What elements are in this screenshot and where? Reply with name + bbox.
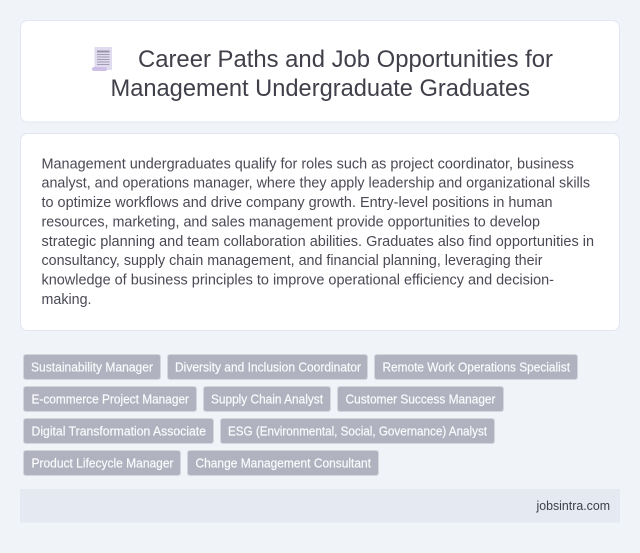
panel: job tags xyxy=(24,354,578,476)
text block: summary paragraph: analyst, and operations manager, where they apply leadership and organizational skills xyxy=(42,176,590,192)
tag: Sustainability Manager xyxy=(24,354,160,380)
text block: summary paragraph: making. xyxy=(42,292,92,308)
tag: ESG analyst: ESG (Environmental, Social, Governance) Analyst xyxy=(228,424,487,438)
tag: Diversity and Inclusion Coordinator: Diversity and Inclusion Coordinator xyxy=(175,360,361,374)
text block: summary paragraph: resources, marketing, and sales management provide opportunities to develop xyxy=(42,214,540,230)
tag: Digital Transformation Associate xyxy=(24,418,214,444)
title: Management Undergraduate Graduates xyxy=(110,75,530,102)
text block: summary paragraph: to optimize workflows and drive company growth. Entry-level positions in human xyxy=(42,195,552,211)
tag: E-commerce Project Manager xyxy=(24,386,196,412)
tag: Diversity and Inclusion Coordinator xyxy=(168,354,368,380)
tag: Customer Success Manager xyxy=(338,386,504,412)
tag: ESG analyst xyxy=(220,418,494,444)
tag: Change Management Consultant: Change Management Consultant xyxy=(196,456,371,470)
tag: Change Management Consultant xyxy=(188,450,378,476)
tag: Digital Transformation Associate: Digital Transformation Associate xyxy=(32,424,206,438)
tag: Supply Chain Analyst xyxy=(204,386,330,412)
tag: Customer Success Manager: Customer Success Manager xyxy=(346,392,496,406)
tag: Product Lifecycle Manager xyxy=(24,450,180,476)
panel: title card xyxy=(20,20,620,122)
icon: scroll document xyxy=(92,47,112,71)
tag: Remote Work Operations Specialist xyxy=(374,354,578,380)
footer source text: jobsintra.com xyxy=(536,499,610,513)
text block: summary paragraph: consultancy, supply chain management, and financial planning, leveraging their xyxy=(42,253,543,269)
tag: Supply Chain Analyst: Supply Chain Analyst xyxy=(211,392,323,406)
tag: E-commerce Project Manager: E-commerce Project Manager xyxy=(32,392,189,406)
title: Career Paths and Job Opportunities for xyxy=(138,46,553,73)
text block: summary paragraph: knowledge of business principles to improve operational efficiency and decision- xyxy=(42,273,554,289)
footer bar xyxy=(20,489,620,522)
panel: summary card xyxy=(20,134,620,330)
text block: summary paragraph: Management undergraduates qualify for roles such as project coordinator, business xyxy=(42,156,574,172)
tag: Product Lifecycle Manager: Product Lifecycle Manager xyxy=(32,456,174,470)
tag: Sustainability Manager: Sustainability Manager xyxy=(31,360,153,374)
text block: summary paragraph xyxy=(42,156,594,308)
text block: summary paragraph: strategic planning and team collaboration abilities. Graduates also find opportunities in xyxy=(42,234,594,250)
title xyxy=(110,46,553,102)
tag: Remote Work Operations Specialist: Remote Work Operations Specialist xyxy=(382,360,570,374)
